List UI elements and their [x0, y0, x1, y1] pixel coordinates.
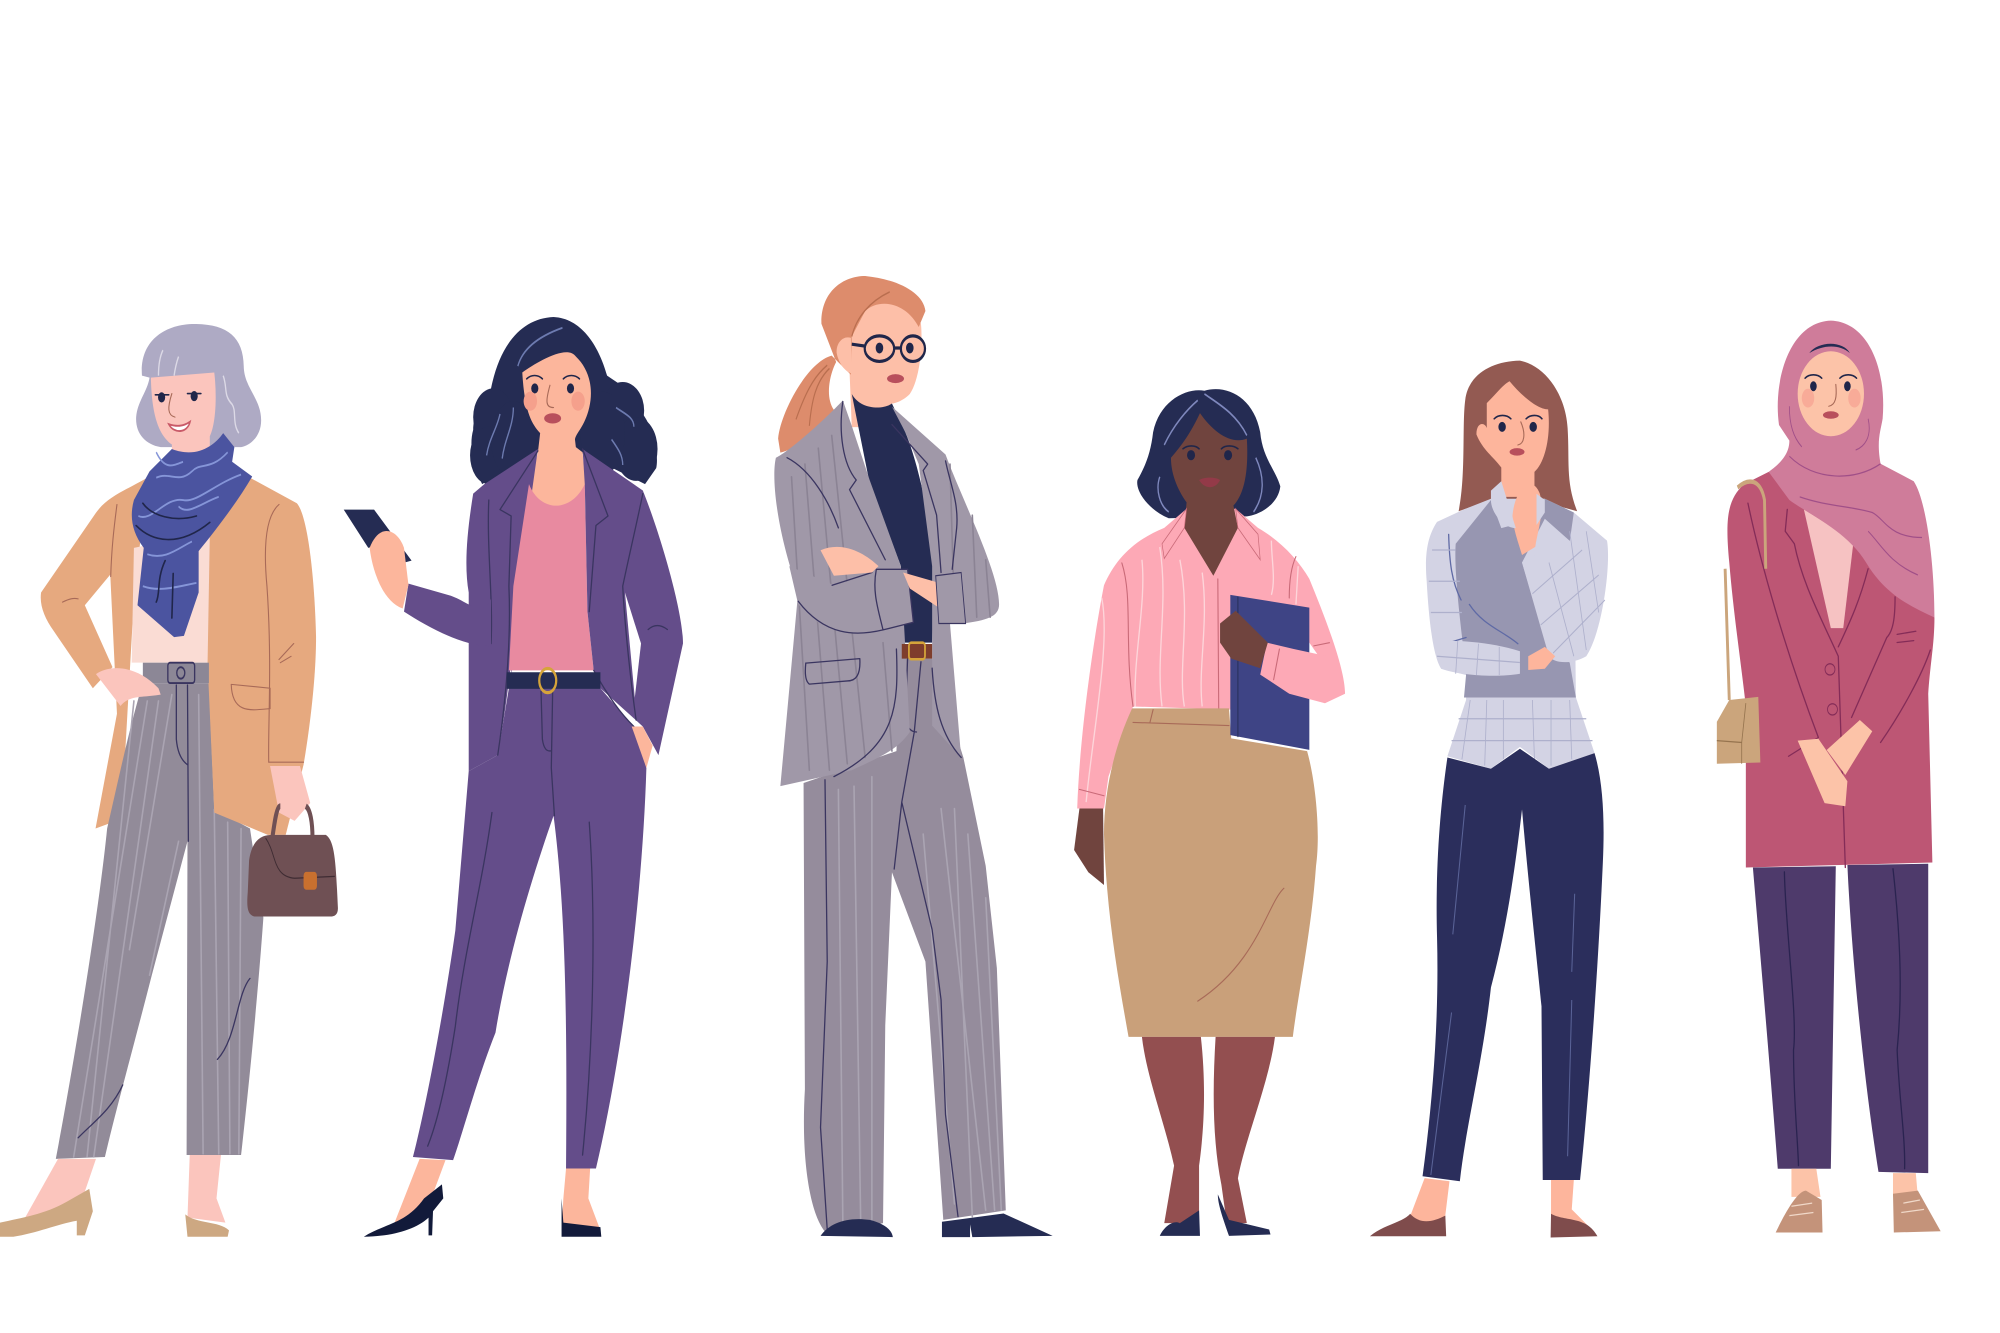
belt and buckle: [143, 663, 209, 683]
purple jacket right and sleeve: [583, 449, 683, 755]
grey hair: [136, 324, 261, 447]
facial features: [1494, 415, 1542, 456]
blue patterned scarf: [132, 433, 252, 637]
figure: woman in pink hijab and crimson coat with shoulder bag: [1717, 321, 1941, 1232]
round glasses: [852, 336, 925, 361]
coat buttons: [1825, 664, 1837, 715]
navy shoes: [821, 1214, 1053, 1237]
pocket hand: [632, 726, 653, 768]
trouser stripes: [74, 695, 241, 1157]
skirt: [1104, 708, 1318, 1037]
group: first two figures: [0, 317, 683, 1237]
rolled cuff: [936, 573, 966, 624]
navy belt with gold buckle: [507, 668, 600, 693]
navy heels: [1160, 1194, 1270, 1236]
purple jacket left: [466, 449, 538, 771]
figure: dark-skinned woman with pink shirt and folder: [1074, 389, 1345, 1236]
forearm sleeve: [1260, 643, 1345, 703]
brown handbag: [247, 806, 338, 917]
face neck and chest: [1171, 413, 1247, 576]
legs: [1408, 1178, 1590, 1228]
tan jacket left panel and arm: [41, 478, 147, 829]
blue folder: [1230, 595, 1309, 750]
purple trousers: [1753, 864, 1928, 1173]
face: [1798, 351, 1864, 436]
black turtleneck: [852, 394, 934, 643]
left leg and shoe: [22, 1159, 96, 1223]
facial features: [155, 350, 239, 433]
hand holding phone: [370, 531, 408, 608]
legs: [1142, 1037, 1275, 1223]
crimson coat: [1727, 472, 1934, 868]
facial features: [1802, 375, 1861, 419]
phone: [344, 510, 412, 564]
navy trousers: [1423, 749, 1604, 1181]
figure: brown-haired woman in plaid with navy trousers: [1370, 361, 1608, 1238]
crossed forearm sleeve: [789, 566, 913, 633]
hanging hand: [270, 766, 310, 821]
raised hand on chin: [1512, 484, 1542, 555]
pale top: [132, 532, 211, 663]
ponytail and hair: [778, 276, 925, 453]
brown belt: [902, 643, 932, 659]
brown flats: [1370, 1214, 1597, 1238]
right leg and shoe: [187, 1155, 225, 1223]
plaid grid: [1429, 550, 1592, 766]
lips: [887, 374, 904, 383]
figure: older woman with scarf and handbag: [0, 324, 338, 1237]
face: [522, 352, 591, 508]
tan jacket right panel: [208, 478, 316, 835]
hanging hand: [1074, 809, 1104, 885]
facial features: [524, 376, 585, 424]
face and neck: [850, 299, 922, 427]
ear: [837, 337, 852, 374]
group: last two figures: [1370, 321, 1941, 1238]
lower hand: [1528, 647, 1555, 670]
collar: [1491, 481, 1545, 528]
pink hijab: [1769, 321, 1934, 618]
face and neck: [151, 372, 216, 468]
legs: [393, 1159, 600, 1230]
figure: woman in purple suit with phone: [344, 317, 683, 1237]
hands: [821, 547, 939, 608]
face and neck: [1476, 381, 1549, 497]
ankles: [1791, 1169, 1918, 1197]
hair under hijab: [1809, 344, 1850, 353]
shirt collar: [1162, 509, 1260, 560]
extended arm: [404, 584, 491, 646]
tan lace-up shoes: [1776, 1191, 1941, 1232]
hand on folder: [1220, 611, 1268, 668]
wavy navy hair: [470, 317, 658, 484]
striped trousers: [56, 683, 263, 1159]
raised arm sleeve: [1522, 512, 1608, 662]
hand on hip: [96, 668, 161, 706]
grey jacket left: [774, 400, 910, 786]
plaid shirt body: [1426, 499, 1595, 769]
clasped hands: [1798, 720, 1872, 806]
grey vest: [1455, 499, 1580, 698]
shoulder bag: [1717, 482, 1766, 764]
black heels: [364, 1184, 601, 1237]
pink top: [509, 484, 594, 670]
forearm sleeve: [1435, 641, 1520, 676]
pale inner top: [1804, 509, 1854, 628]
purple trousers: [413, 688, 646, 1168]
facial features: [1183, 446, 1238, 487]
figure: red-haired woman in grey suit with glasses: [774, 276, 1053, 1237]
shirt: [1077, 509, 1345, 809]
grey trousers: [804, 659, 1006, 1236]
gap between arm and body: [625, 593, 641, 698]
group: middle two figures: [774, 276, 1345, 1237]
brown hair: [1459, 361, 1577, 511]
hair: [1137, 389, 1280, 518]
grey jacket right: [892, 407, 999, 757]
